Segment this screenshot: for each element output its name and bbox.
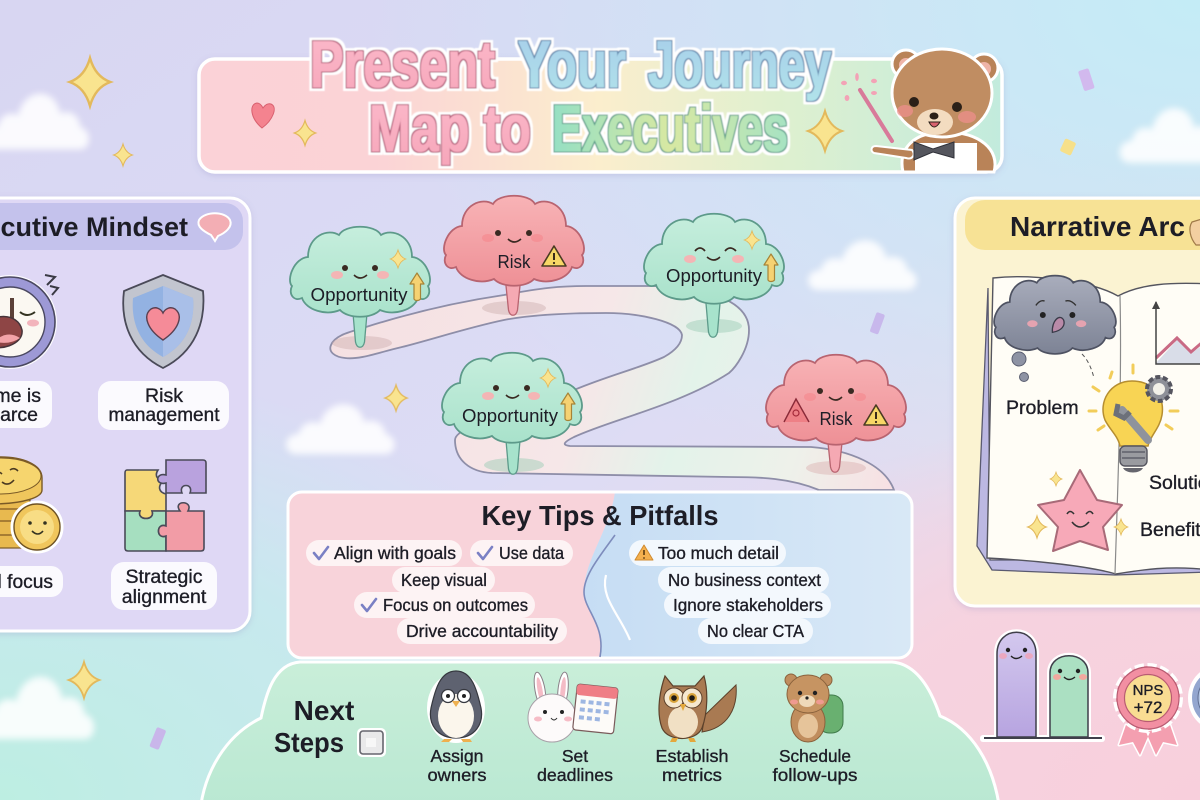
icon: sparkle left [294, 120, 316, 146]
chart: metric bars [980, 632, 1105, 742]
chart: rising line [1152, 301, 1200, 364]
marker: opportunity 2: Opportunity [666, 265, 763, 286]
icon: sleeping clock [0, 275, 58, 369]
badge: nps +72: NPS [1133, 682, 1163, 699]
journey road [330, 286, 894, 490]
tip: keep visual [392, 567, 495, 593]
label: strategic alignment [111, 562, 217, 610]
label: assign owners: owners [428, 765, 487, 785]
title banner [199, 27, 1002, 172]
icon: lightbulb with wrench and gear [1089, 365, 1178, 472]
label: time is scarce [0, 381, 52, 428]
tip: focus on outcomes: Focus on outcomes [383, 595, 528, 615]
icon: bunny with calendar [528, 671, 618, 742]
label: assign owners: Assign [430, 746, 484, 766]
tip: focus on outcomes [354, 592, 535, 618]
tip: drive accountability [397, 618, 567, 644]
marker: risk 1: Risk [498, 251, 531, 272]
title word: executives: Executives [552, 91, 788, 165]
label: risk management: management [108, 404, 220, 426]
icon: sparkle right [808, 111, 842, 151]
illustration: open storybook [977, 276, 1200, 575]
label: risk management [98, 381, 229, 430]
tip: drive accountability: Drive accountability [406, 621, 558, 641]
icon: penguin [427, 671, 485, 743]
label: strategic alignment: Strategic [126, 566, 203, 588]
label: schedule follow-ups: follow-ups [772, 765, 858, 785]
tip: keep visual: Keep visual [401, 570, 487, 590]
tip: align with goals: Align with goals [334, 543, 456, 563]
icon: coins [0, 457, 62, 552]
icon: problem storm cloud [994, 276, 1116, 354]
label: financial focus [0, 566, 63, 597]
decoration: sparkles [69, 58, 407, 698]
marker: risk 2 [766, 355, 906, 472]
label: schedule follow-ups: Schedule [779, 746, 851, 766]
label: schedule follow-ups [772, 746, 858, 785]
badge: nps +72: +72 [1134, 698, 1162, 717]
heading: next steps: Next [294, 695, 354, 726]
icon: heart [252, 103, 274, 128]
label: set deadlines [537, 746, 613, 785]
marker: opportunity 3 [442, 353, 582, 474]
icon: smiling star [1028, 470, 1128, 551]
marker: opportunity 1: Opportunity [311, 284, 408, 305]
title word: your: Your [518, 27, 626, 101]
pitfall: ignore stakeholders: Ignore stakeholders [673, 595, 823, 615]
title word: present: Present [310, 27, 495, 101]
pitfall: no clear cta: No clear CTA [707, 621, 804, 641]
icon: checkbox [357, 728, 386, 757]
marker: opportunity 3: Opportunity [462, 405, 559, 426]
panel: key tips and pitfalls [288, 492, 912, 658]
pitfall: too much detail: Too much detail [658, 543, 779, 563]
pitfall: too much detail [629, 540, 786, 566]
icon: shield with heart [123, 275, 203, 368]
label: problem: Problem [1006, 397, 1079, 419]
label: set deadlines: deadlines [537, 765, 613, 785]
marker: opportunity 1 [290, 227, 430, 347]
icon: owl [659, 676, 736, 742]
badge: nps +72 [1116, 666, 1180, 755]
panel: narrative arc [955, 198, 1200, 606]
marker: risk 2: Risk [820, 408, 853, 429]
icon: bear mascot with pointer [841, 49, 998, 172]
heading: next steps [274, 695, 354, 758]
label: establish metrics: metrics [662, 765, 722, 785]
title word: journey: Journey [648, 27, 831, 101]
icon: bear with backpack [785, 674, 843, 742]
pitfall: no business context: No business context [668, 570, 821, 590]
icon: hand [1190, 218, 1200, 245]
pitfall: no clear cta [698, 618, 813, 644]
panel: next steps [200, 662, 1000, 800]
panel: executive mindset [0, 198, 250, 631]
decoration: confetti [149, 68, 1095, 750]
label: benefit: Benefit [1140, 519, 1200, 541]
icon: puzzle [125, 460, 206, 551]
heading: next steps: Steps [274, 727, 344, 758]
label: assign owners [428, 746, 487, 785]
label: set deadlines: Set [562, 746, 588, 766]
tip: use data [470, 540, 573, 566]
label: establish metrics: Establish [656, 746, 728, 766]
heading: narrative arc: Narrative Arc [1010, 211, 1185, 242]
title words: map to: Map to [369, 91, 531, 165]
tip: align with goals [306, 540, 462, 566]
tip: use data: Use data [499, 543, 564, 563]
heading: key tips and pitfalls: Key Tips & Pitfalls [482, 500, 718, 531]
label: risk management: Risk [145, 385, 183, 407]
badge: second metric, cropped [1190, 666, 1200, 730]
label: strategic alignment: alignment [122, 586, 207, 608]
icon: brain [198, 213, 231, 241]
label: establish metrics [656, 746, 728, 785]
marker: risk 1 [444, 196, 584, 315]
marker: opportunity 2 [644, 214, 784, 337]
